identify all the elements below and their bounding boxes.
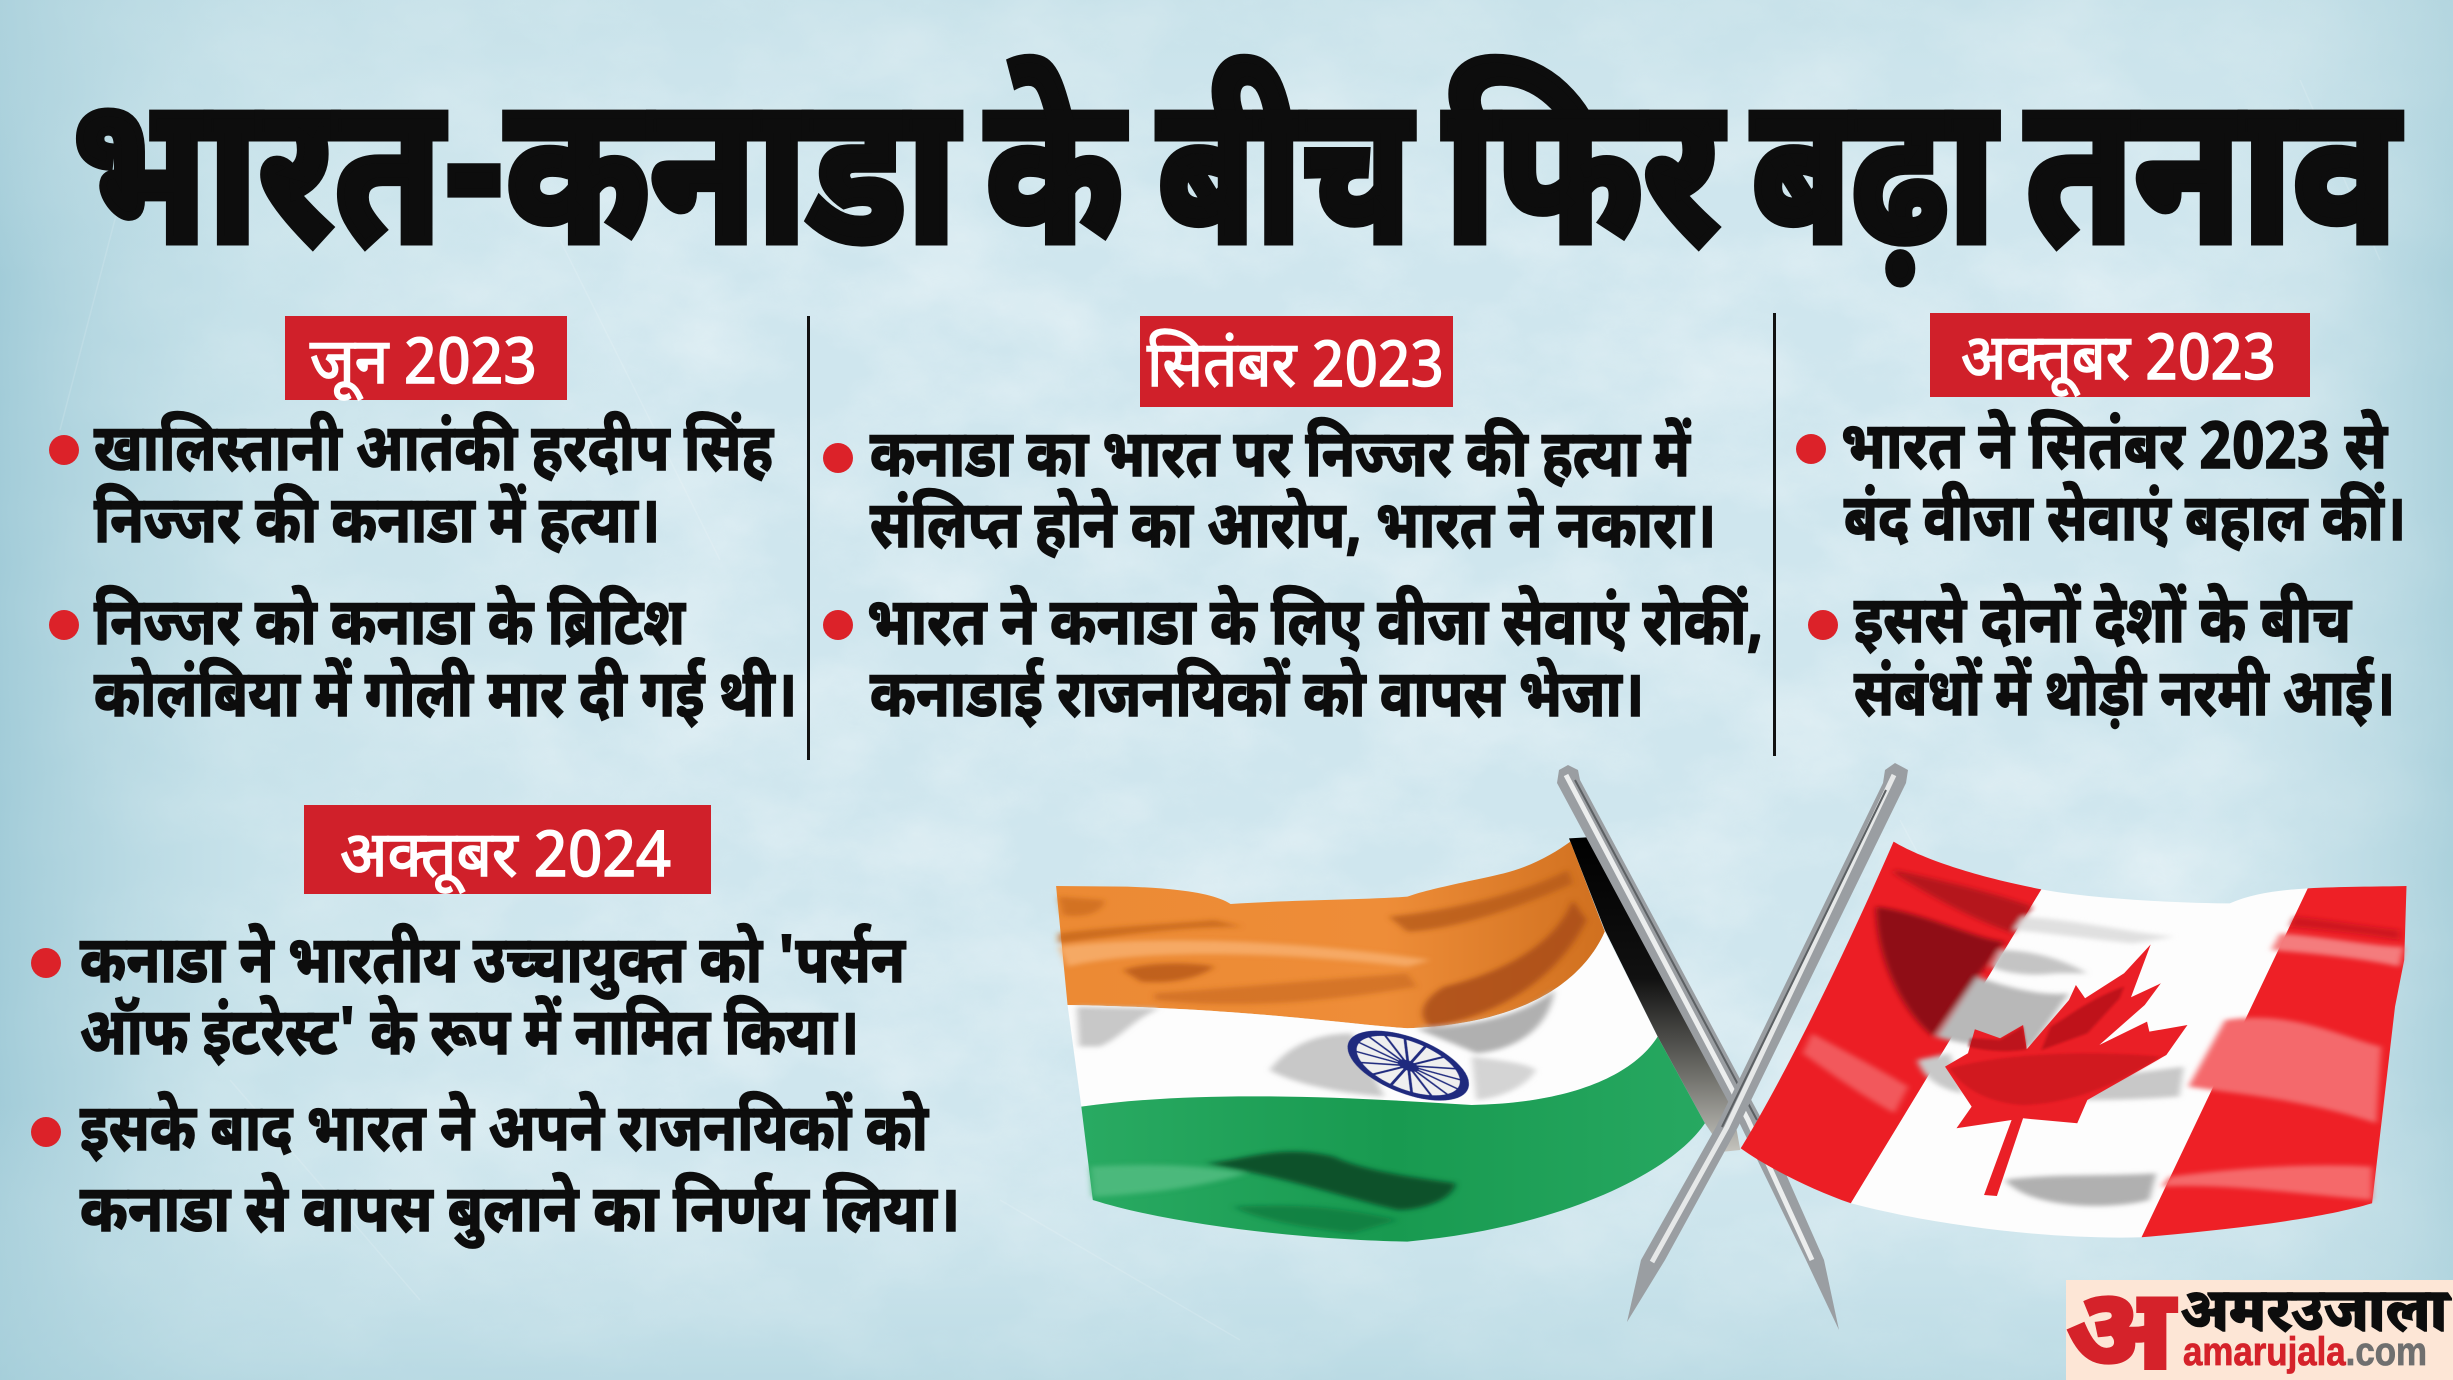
- Ashoka chakra: [1337, 1020, 1480, 1111]
- panel: June 2023: [49, 316, 797, 743]
- bullet text: visa services stopped: [823, 584, 1763, 743]
- title: के: [986, 57, 1126, 325]
- bullet text: visas resumed: [1796, 408, 2406, 567]
- bullet text: visas resumed: भारत ने सितंबर 2023 से: [1841, 408, 2388, 495]
- bullet text: diplomats recalled: [31, 1090, 960, 1258]
- logo url: amarujala.com: [2183, 1330, 2427, 1374]
- bullet text: diplomats recalled: कनाडा से वापस बुलाने का निर्णय लिया।: [80, 1171, 960, 1258]
- crossed flags illustration: [1056, 763, 2407, 1330]
- bullet text: visa services stopped: भारत ने कनाडा के लिए वीजा सेवाएं रोकीं,: [867, 584, 1763, 671]
- title: फिर: [1444, 58, 1724, 325]
- flag: Canada: [1741, 842, 2407, 1238]
- bullet text: relations softened: इससे दोनों देशों के बीच: [1854, 582, 2353, 669]
- black hoist strip: [1569, 837, 1740, 1152]
- bullet text: accusation: संलिप्त होने का आरोप, भारत ने नकारा।: [870, 487, 1716, 574]
- title: बीच: [1158, 58, 1414, 325]
- left pole: [1557, 765, 1839, 1330]
- bullet text: accusation: [823, 417, 1716, 574]
- heading: October 2024: [304, 805, 711, 902]
- bullet text: shot in British Columbia: कोलंबिया में गोली मार दी गई थी।: [94, 657, 797, 743]
- bullet text: Nijjar killed: खालिस्तानी आतंकी हरदीप सिंह: [94, 411, 774, 497]
- heading: October 2024: अक्तूबर 2024: [340, 820, 671, 902]
- heading: October 2023: अक्तूबर 2023: [1961, 323, 2276, 405]
- logo wordmark: अमरउजाला: [2182, 1277, 2451, 1367]
- heading: June 2023: जून 2023: [310, 327, 537, 409]
- bullet text: diplomats recalled: इसके बाद भारत ने अपने राजनयिकों को: [80, 1090, 930, 1177]
- panel: October 2024: [31, 805, 960, 1258]
- title: भारत-कनाडा: [72, 59, 960, 325]
- panel: October 2023: [1796, 313, 2406, 742]
- bullet text: person of interest: [31, 922, 906, 1081]
- title: [72, 57, 2401, 325]
- bullet text: person of interest: कनाडा ने भारतीय उच्चायुक्त को 'पर्सन: [80, 922, 906, 1009]
- title: बढ़ा: [1752, 59, 1998, 325]
- bullet text: relations softened: [1808, 582, 2395, 742]
- logo: Amar Ujala: [2066, 1268, 2453, 1380]
- title: तनाव: [2026, 59, 2401, 325]
- bullet text: shot in British Columbia: [49, 584, 797, 743]
- panel: September 2023: [823, 316, 1763, 743]
- heading: September 2023: सितंबर 2023: [1147, 330, 1444, 412]
- bullet text: Nijjar killed: [49, 411, 774, 569]
- bullet text: person of interest: ऑफ इंटरेस्ट' के रूप में नामित किया।: [80, 994, 859, 1081]
- bullet text: shot in British Columbia: निज्जर को कनाडा के ब्रिटिश: [94, 584, 686, 671]
- bullet text: visa services stopped: कनाडाई राजनयिकों को वापस भेजा।: [870, 656, 1644, 743]
- bullet text: Nijjar killed: निज्जर की कनाडा में हत्या।: [94, 483, 660, 569]
- flag: India: [1056, 842, 1705, 1242]
- maple leaf: [1945, 944, 2187, 1196]
- right pole: [1627, 763, 1908, 1322]
- bullet text: accusation: कनाडा का भारत पर निज्जर की हत्या में: [870, 417, 1691, 503]
